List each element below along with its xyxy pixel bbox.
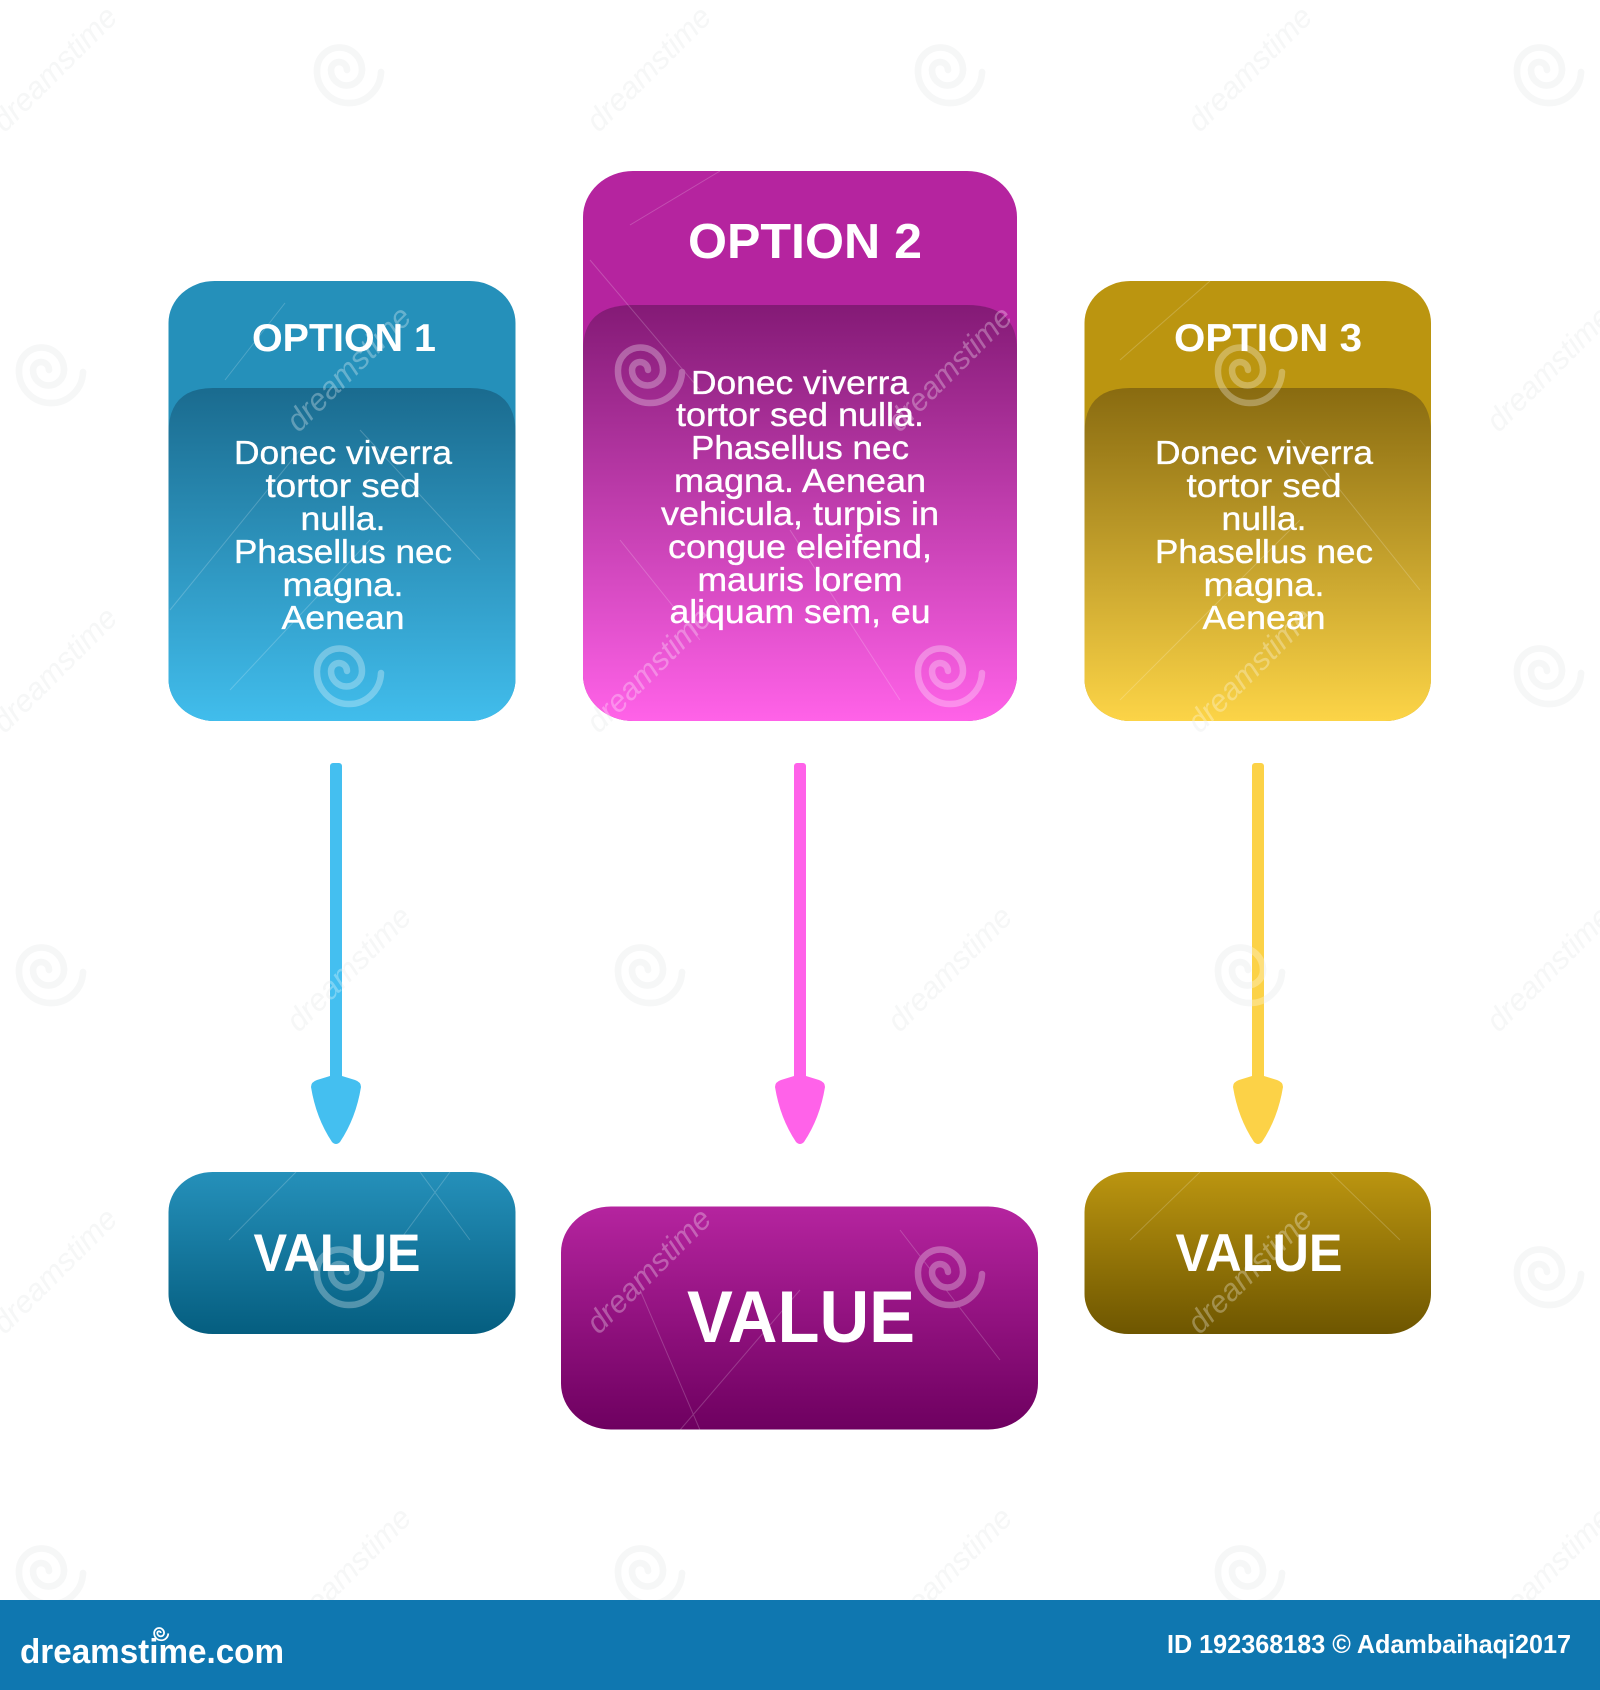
text block: option 3: nulla. — [1222, 500, 1306, 537]
text block: option 2: tortor sed nulla. — [676, 396, 924, 433]
value box 3 — [1084, 1172, 1431, 1334]
text block: option 3: Phasellus nec — [1155, 533, 1373, 570]
panel: option 3 — [1084, 281, 1431, 721]
text block: option 1: magna. — [282, 566, 404, 603]
text block: option 2: Phasellus nec — [691, 429, 909, 466]
text block: option 2: magna. Aenean — [674, 462, 926, 499]
heading: option 2: OPTION 2 — [688, 215, 922, 269]
text block: option 3: tortor sed — [1186, 467, 1342, 504]
text block: option 2: aliquam sem, eu — [670, 593, 930, 630]
option 1 inner gradient panel — [168, 388, 516, 721]
text block: option 1: tortor sed — [266, 467, 420, 504]
text block: option 1 — [234, 434, 453, 636]
label: value 1: VALUE — [254, 1224, 420, 1283]
heading: option 3: OPTION 3 — [1174, 317, 1362, 360]
arrow: option 1 to value — [311, 763, 361, 1144]
heading: option 1: OPTION 1 — [252, 317, 436, 360]
panel: option 1 — [168, 281, 516, 721]
label: value 2: VALUE — [687, 1277, 915, 1358]
arrow: option 2 to value — [775, 763, 825, 1144]
text block: option 1: nulla. — [300, 500, 386, 537]
text block: option 2: congue eleifend, — [668, 528, 932, 565]
text block: option 2: mauris lorem — [698, 561, 902, 598]
text block: option 1: Donec viverra — [234, 434, 453, 471]
option 2 inner gradient panel — [583, 305, 1017, 721]
text block: option 2: Donec viverra — [691, 364, 910, 401]
value box 1 — [168, 1172, 516, 1334]
footer bar — [0, 1600, 1600, 1690]
text block: option 3: magna. — [1204, 566, 1324, 603]
logo spiral — [154, 1628, 168, 1640]
text block: option 2: vehicula, turpis in — [661, 495, 939, 532]
text block: option 3: Aenean — [1202, 599, 1326, 636]
text block: option 3: Donec viverra — [1155, 434, 1374, 471]
panel: option 2 — [583, 171, 1017, 721]
image id and credit: ID 192368183 © Adambaihaqi2017 — [1167, 1629, 1571, 1659]
text block: option 1: Aenean — [282, 599, 404, 636]
label: value 3: VALUE — [1176, 1224, 1342, 1283]
arrow: option 3 to value — [1233, 763, 1283, 1144]
option 3 inner gradient panel — [1084, 388, 1431, 721]
text block: option 3 — [1155, 434, 1374, 636]
text block: option 2 — [661, 364, 939, 630]
text block: option 1: Phasellus nec — [234, 533, 452, 570]
value box 2 — [561, 1206, 1038, 1430]
footer logo: dreamstime.com — [20, 1633, 284, 1671]
